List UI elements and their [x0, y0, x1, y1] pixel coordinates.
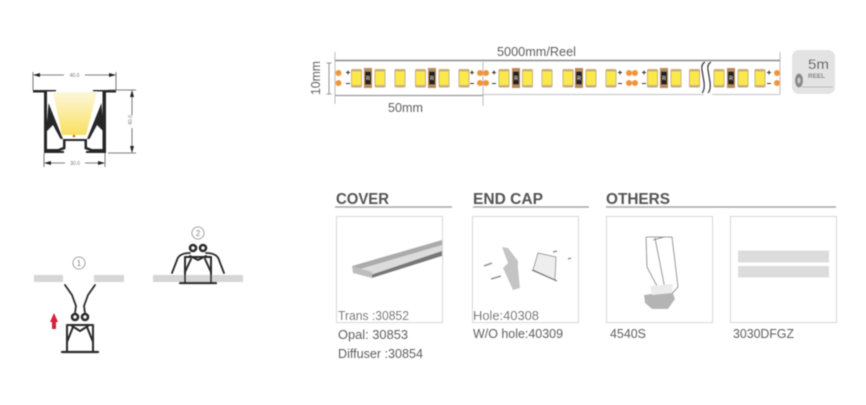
profile body	[33, 90, 116, 153]
cover part numbers	[338, 309, 423, 361]
resistors: R	[366, 76, 370, 82]
end cap part numbers: Hole:40308	[473, 309, 539, 323]
solder pads	[336, 70, 780, 86]
resistors	[364, 68, 735, 88]
bracket label: 3030DFGZ	[733, 327, 794, 341]
installed profile	[172, 245, 224, 283]
50mm label: 50mm	[388, 101, 423, 115]
up arrow	[50, 313, 58, 329]
bracket bars	[738, 250, 829, 278]
clip image box	[606, 216, 712, 322]
resistors: R	[514, 76, 518, 82]
step number 1: 1	[77, 259, 82, 268]
step number 2: 2	[196, 229, 201, 238]
reel badge: REEL	[808, 73, 825, 80]
end cap image box	[472, 216, 578, 322]
clip label: 4540S	[610, 327, 646, 341]
ceiling panel	[153, 275, 243, 282]
cover image box	[336, 216, 442, 322]
ceiling panel left and right	[34, 275, 124, 282]
LED strip diagram	[309, 45, 780, 115]
spring clip profile	[62, 285, 98, 352]
reel badge	[792, 50, 835, 94]
break mark	[702, 62, 711, 93]
5000mm per reel label: 5000mm/Reel	[497, 45, 576, 59]
polarity marks	[346, 70, 771, 84]
reel badge: 5m	[808, 56, 829, 72]
resistors: R	[662, 76, 666, 82]
profile cross-section drawing	[33, 72, 136, 167]
cover profile image	[352, 240, 442, 278]
installation step 2	[153, 227, 243, 283]
guide lines	[335, 52, 780, 106]
10mm label: 10mm	[309, 61, 323, 95]
resistors: R	[729, 76, 733, 82]
light beam	[53, 92, 97, 135]
section: end cap	[472, 191, 589, 341]
end cap part numbers: W/O hole:40309	[473, 327, 563, 341]
resistors: R	[577, 76, 581, 82]
reel icon	[795, 74, 833, 88]
clip 4540S image	[644, 237, 678, 309]
10mm label	[309, 61, 332, 95]
cover part numbers: Diffuser :30854	[338, 347, 423, 361]
heading: COVER	[336, 191, 389, 208]
cover part numbers: Opal: 30853	[338, 328, 408, 342]
top dimension: 40.0	[70, 73, 80, 79]
strip outline	[335, 60, 780, 62]
end cap parts image	[484, 247, 571, 290]
heading: END CAP	[473, 191, 543, 208]
LED chips	[351, 69, 766, 88]
installation step 1	[34, 257, 124, 352]
height dimension: 40.0	[128, 115, 134, 125]
cover part numbers: Trans :30852	[338, 309, 409, 323]
section: cover	[335, 191, 452, 361]
end cap part numbers	[473, 309, 563, 341]
bracket image box	[730, 216, 836, 322]
bottom dimension: 30.0	[70, 161, 80, 167]
section: others	[606, 191, 836, 341]
heading: OTHERS	[606, 191, 670, 208]
resistors: R	[430, 76, 434, 82]
